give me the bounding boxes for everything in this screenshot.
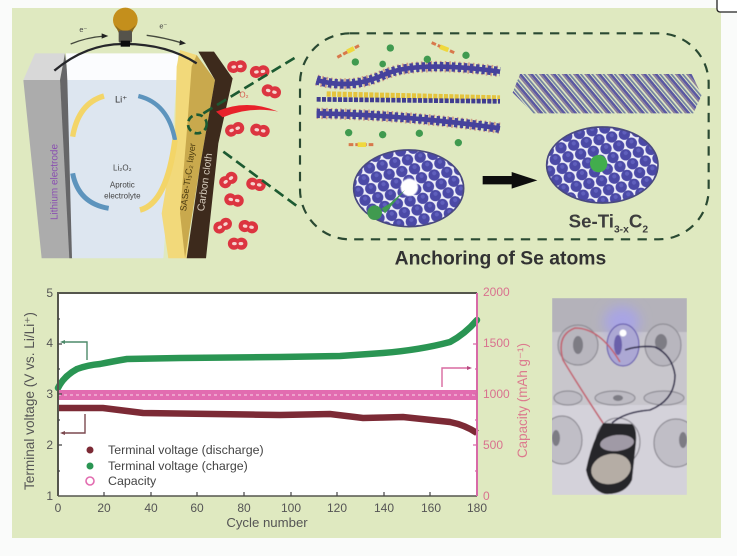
O2 molecules [211, 60, 282, 250]
electron arrows: e⁻ [159, 22, 167, 31]
SASe-Ti3C2 layer: SASe-Ti₃C₂ layer [178, 142, 198, 212]
legend: Terminal voltage (charge) [108, 459, 248, 473]
printed circular patterns [552, 323, 687, 468]
ticks [58, 319, 430, 496]
x axis labels: 100 [281, 501, 301, 515]
electrolyte chamber [66, 53, 178, 258]
left axis labels [46, 286, 53, 503]
left axis labels: 1 [46, 489, 53, 503]
Li+ label and cycle arrows: electrolyte [104, 191, 141, 200]
band: capacity [58, 390, 477, 400]
x axis labels: 60 [190, 501, 204, 515]
curve: discharge voltage [58, 408, 477, 433]
left axis labels: 3 [46, 387, 53, 401]
x axis labels: 80 [237, 501, 251, 515]
Se-Ti3-xC2 label: 3-x [614, 225, 629, 236]
O2 red arrow: O₂ [239, 90, 249, 99]
right axis labels [483, 285, 510, 503]
layered MXene sheets [317, 67, 500, 128]
chart: cycling performance [22, 285, 530, 530]
electron arrows [71, 22, 186, 45]
x axis labels [55, 501, 487, 515]
x axis labels: 140 [374, 501, 394, 515]
electron arrows: e⁻ [79, 25, 87, 34]
photo: LED powered by cell [552, 298, 687, 495]
corner box [717, 0, 737, 12]
Li+ label and cycle arrows: Li⁺ [115, 95, 127, 105]
x axis labels: 180 [467, 501, 487, 515]
Se-Ti3-xC2 label: C [629, 211, 642, 232]
carbon cloth [187, 52, 233, 258]
light bulb [113, 8, 138, 47]
x axis labels: 20 [97, 501, 111, 515]
red wire [561, 328, 620, 423]
right axis labels: 2000 [483, 285, 510, 299]
Li+ label and cycle arrows: Aprotic [110, 180, 135, 189]
printed dark details [552, 334, 687, 448]
glowing LED [620, 330, 626, 336]
x axis labels: 40 [144, 501, 158, 515]
crystal block [513, 74, 702, 113]
coin cell holder [586, 423, 636, 494]
curve: charge voltage [58, 320, 477, 388]
legend: Terminal voltage (discharge) [108, 443, 264, 457]
electrons wire [54, 44, 197, 71]
left axis labels: 2 [46, 438, 53, 452]
x axis labels: 0 [55, 501, 62, 515]
left axis labels: 4 [46, 336, 53, 350]
right axis labels: 0 [483, 489, 490, 503]
chart: cycling performance: Cycle number [226, 515, 308, 530]
O2 red arrow [216, 90, 278, 117]
defect disc [354, 150, 464, 227]
dashed rounded frame [300, 33, 709, 239]
left axis labels: 5 [46, 286, 53, 300]
lithium electrode [23, 53, 73, 258]
legend: Capacity [108, 474, 157, 488]
battery diagram [23, 8, 300, 258]
black wire [612, 346, 675, 423]
Se-filled disc [547, 127, 658, 203]
plot area [58, 293, 477, 496]
right axis labels: 1500 [483, 336, 510, 350]
Li+ label and cycle arrows [73, 95, 175, 210]
axis titles: Terminal voltage (V vs. Li/Li⁺) [22, 312, 37, 490]
reaction arrow [483, 172, 537, 189]
x axis labels: 120 [327, 501, 347, 515]
Li+ label and cycle arrows: Li₂O₂ [113, 164, 132, 173]
series indicators [60, 340, 472, 435]
Se-Ti3-xC2 label: Se-Ti [569, 211, 614, 232]
Se atoms and molecules [337, 43, 470, 146]
right axis labels: 1000 [483, 387, 510, 401]
axes [58, 293, 477, 496]
right axis labels: 500 [483, 438, 503, 452]
dashed zoom guides [188, 57, 300, 208]
x axis labels: 160 [421, 501, 441, 515]
carbon cloth: Carbon cloth [196, 152, 215, 212]
caption: Anchoring of Se atoms [395, 248, 606, 269]
Se-Ti3-xC2 label: 2 [642, 225, 648, 236]
panel: anchoring of Se atoms [300, 33, 709, 269]
SASe-Ti3C2 layer [162, 50, 215, 258]
legend [86, 443, 264, 488]
chart: cycling performance: Capacity (mAh g⁻¹) [515, 343, 530, 458]
lithium electrode: Lithium electrode [49, 144, 60, 220]
